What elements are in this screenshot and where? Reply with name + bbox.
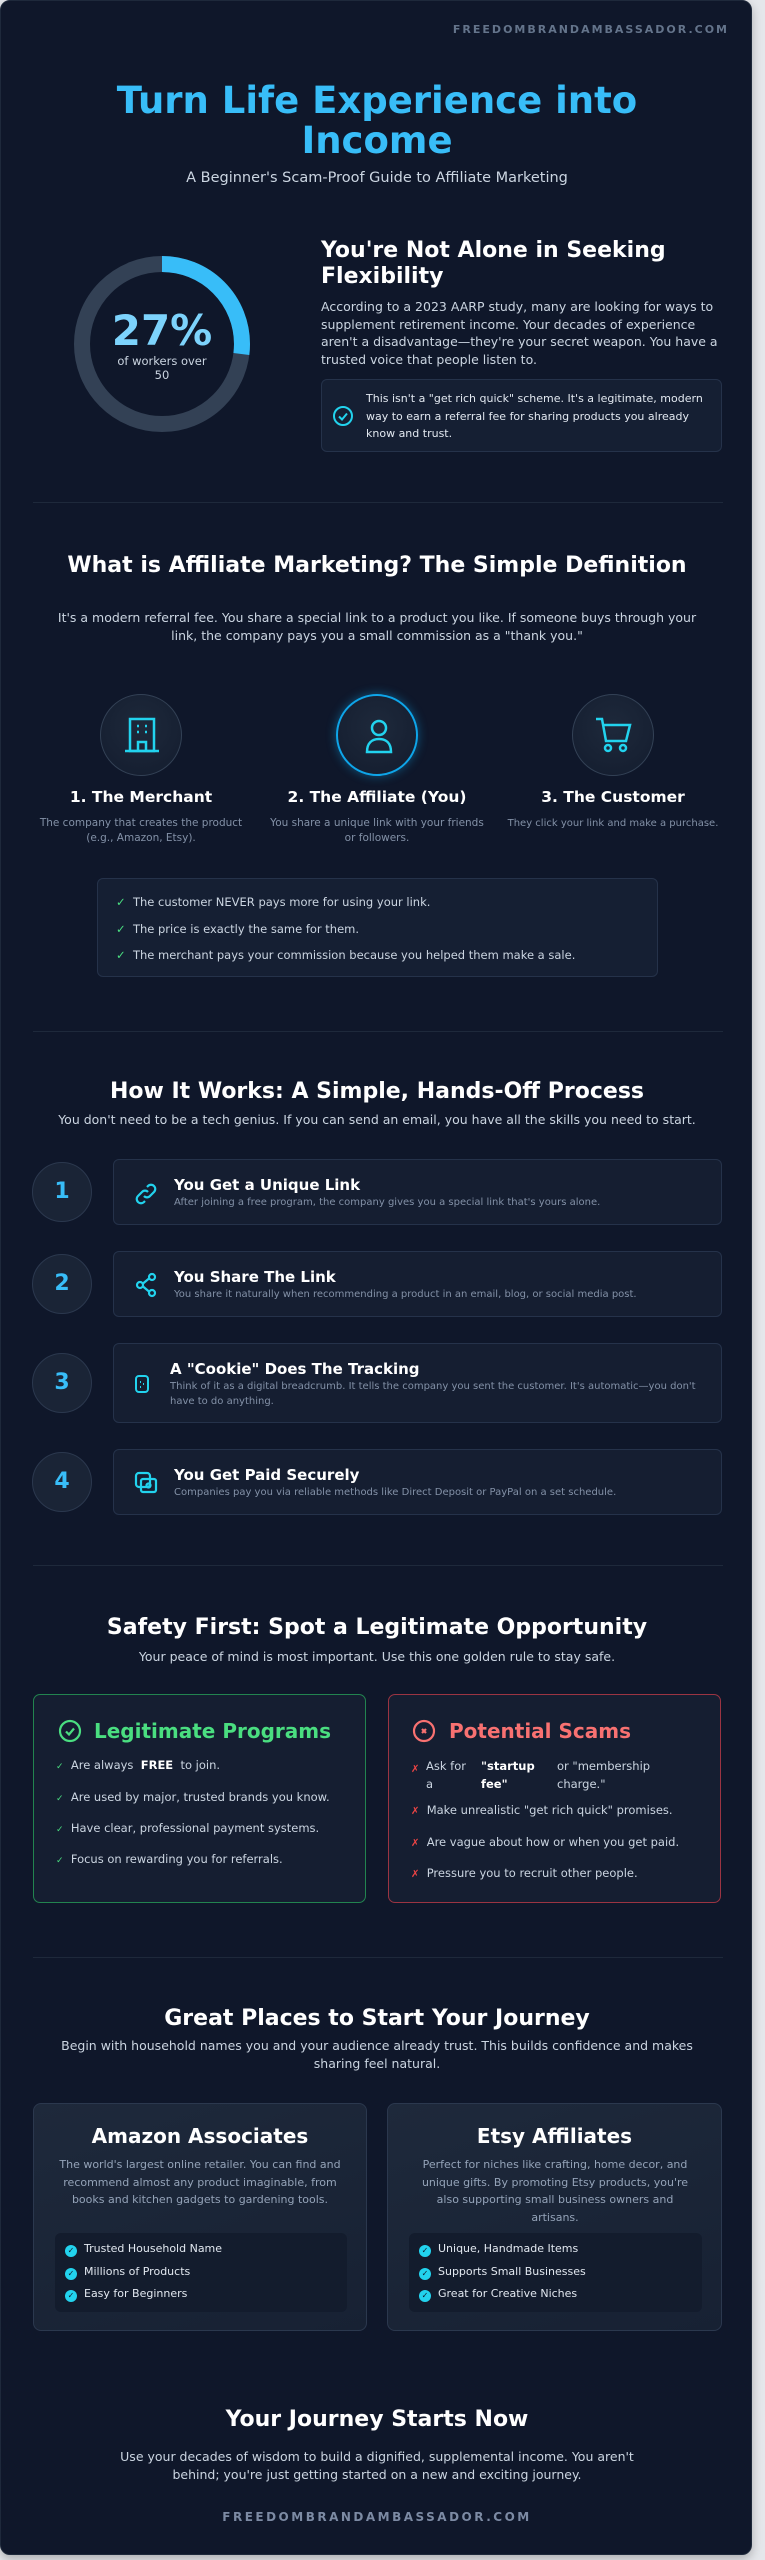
step 3 xyxy=(32,1353,92,1413)
donut chart: 27% xyxy=(74,256,250,432)
panel: etsy affiliates: ✓ xyxy=(422,2269,428,2278)
callout box xyxy=(321,379,722,452)
panel: amazon associates: ✓ xyxy=(68,2269,74,2278)
main card: You share a unique link with your friends or followers. xyxy=(270,817,484,844)
panel: legitimate programs: Legitimate Programs xyxy=(94,1719,331,1743)
main card: You don't need to be a tech genius. If you can send an email, you have all the skills you need to start. xyxy=(58,1112,696,1127)
definition paragraph: It's a modern referral fee. You share a special link to a product you like. If someone buys through your link, the company pays you a small commission as a "thank you." xyxy=(58,610,696,643)
main card: The company that creates the product (e.g., Amazon, Etsy). xyxy=(40,817,242,844)
label: customer: 3. The Customer xyxy=(541,788,685,806)
step 2: 2 xyxy=(54,1271,70,1296)
heading: what is affiliate marketing: What is Affiliate Marketing? The Simple Definition xyxy=(67,553,687,578)
label: merchant: 1. The Merchant xyxy=(70,788,212,806)
panel: etsy affiliates: Unique, Handmade Items xyxy=(438,2242,578,2255)
heading: not alone: You're Not Alone in Seeking Flexibility xyxy=(321,238,666,289)
subtitle: A Beginner's Scam-Proof Guide to Affiliate Marketing xyxy=(186,170,568,186)
panel: potential scams: ✗ xyxy=(411,1764,419,1775)
panel: potential scams: Potential Scams xyxy=(449,1719,631,1743)
heading: great places: Great Places to Start Your Journey xyxy=(164,2006,590,2031)
main card: Begin with household names you and your audience already trust. This builds confidence and makes sharing feel natural. xyxy=(61,2038,693,2071)
step 3: 3 xyxy=(54,1370,70,1395)
step 1 xyxy=(32,1162,92,1222)
main card: After joining a free program, the company gives you a special link that's yours alone. xyxy=(174,1197,600,1208)
footer brand: FREEDOMBRANDAMBASSADOR.COM xyxy=(222,2510,532,2524)
main card: Your peace of mind is most important. Use this one golden rule to stay safe. xyxy=(139,1649,615,1664)
icon: check circle xyxy=(333,406,353,426)
footer heading: Your Journey Starts Now xyxy=(226,2407,528,2432)
footer text: Use your decades of wisdom to build a dignified, supplemental income. You aren't behind; you're just getting started on a new and exciting journey. xyxy=(120,2449,634,2482)
step 4: 4 xyxy=(54,1469,70,1494)
panel: amazon associates xyxy=(33,2103,367,2331)
panel: etsy affiliates: Perfect for niches like crafting, home decor, and unique gifts. By promoting Etsy products, you're also supporting small business owners and artisans. xyxy=(422,2158,688,2224)
panel: etsy affiliates: Great for Creative Niches xyxy=(438,2287,577,2300)
donut chart: 27%: of workers over 50 xyxy=(117,354,207,382)
header brand: FREEDOMBRANDAMBASSADOR.COM xyxy=(453,23,729,36)
step 4 xyxy=(32,1452,92,1512)
panel: amazon associates: Millions of Products xyxy=(84,2265,190,2278)
panel: potential scams: ✗ Are vague about how or when you get paid. xyxy=(411,1835,679,1849)
panel: etsy affiliates: ✓ xyxy=(422,2246,428,2255)
panel: amazon associates: The world's largest online retailer. You can find and recommend almost any product imaginable, from books and kitchen gadgets to gardening tools. xyxy=(59,2158,341,2206)
panel: potential scams: "startup fee" xyxy=(481,1759,535,1791)
icon: merchant building xyxy=(100,694,182,776)
panel: amazon associates: Amazon Associates xyxy=(92,2124,308,2148)
panel: potential scams: or "membership charge." xyxy=(557,1759,650,1791)
main card: A "Cookie" Does The Tracking xyxy=(170,1360,420,1378)
main card: Companies pay you via reliable methods like Direct Deposit or PayPal on a set schedule. xyxy=(174,1487,616,1498)
heading: how it works: How It Works: A Simple, Hands-Off Process xyxy=(110,1079,644,1104)
panel: potential scams: ✗ Pressure you to recruit other people. xyxy=(411,1866,638,1880)
icon: customer cart xyxy=(572,694,654,776)
panel: legitimate programs: ✓ Are used by major, trusted brands you know. xyxy=(56,1790,330,1804)
panel: legitimate programs: ✓ Focus on rewarding you for referrals. xyxy=(56,1852,283,1866)
facts box: ✓ The price is exactly the same for them. xyxy=(116,922,359,936)
step 1: 1 xyxy=(54,1179,70,1204)
panel: amazon associates: ✓ xyxy=(68,2291,74,2300)
icon: affiliate person xyxy=(336,694,418,776)
heading: safety first: Safety First: Spot a Legitimate Opportunity xyxy=(107,1615,647,1640)
panel: legitimate programs xyxy=(33,1694,366,1903)
panel: etsy affiliates: Etsy Affiliates xyxy=(477,2124,632,2148)
panel: potential scams xyxy=(388,1694,721,1903)
panel: amazon associates: Easy for Beginners xyxy=(84,2287,187,2300)
main card: You share it naturally when recommending a product in an email, blog, or social media post. xyxy=(174,1289,637,1300)
panel: etsy affiliates xyxy=(387,2103,722,2331)
panel: potential scams: Ask for a xyxy=(426,1759,466,1791)
facts box: ✓ The merchant pays your commission because you helped them make a sale. xyxy=(116,948,575,962)
panel: amazon associates: Trusted Household Name xyxy=(84,2242,222,2255)
label: affiliate: 2. The Affiliate (You) xyxy=(288,788,466,806)
facts box xyxy=(97,878,658,977)
panel: potential scams: ✗ Make unrealistic "get rich quick" promises. xyxy=(411,1803,673,1817)
panel: etsy affiliates: Supports Small Businesses xyxy=(438,2265,586,2278)
panel: legitimate programs: ✓ Have clear, professional payment systems. xyxy=(56,1821,319,1835)
main card: They click your link and make a purchase. xyxy=(508,818,718,829)
main card: You Get a Unique Link xyxy=(174,1176,360,1194)
main card: Think of it as a digital breadcrumb. It tells the company you sent the customer. It's automatic—you don't have to do anything. xyxy=(170,1381,696,1407)
step 2 xyxy=(32,1254,92,1314)
facts box: ✓ The customer NEVER pays more for using your link. xyxy=(116,895,430,909)
panel: legitimate programs: ✓ Are always FREE to join. xyxy=(56,1758,220,1772)
panel: etsy affiliates: ✓ xyxy=(422,2291,428,2300)
main card: You Get Paid Securely xyxy=(174,1466,359,1484)
title: Turn Life Experience into Income xyxy=(117,79,637,162)
main card: You Share The Link xyxy=(174,1268,336,1286)
paragraph: AARP: According to a 2023 AARP study, many are looking for ways to supplement retirement income. Your decades of experience aren't a disadvantage—they're your secret weapon. You have a trusted voice that people listen to. xyxy=(321,299,718,366)
callout box: This isn't a "get rich quick" scheme. It's a legitimate, modern way to earn a referral fee for sharing products you already know and trust. xyxy=(366,392,703,440)
donut chart: 27%: 27% xyxy=(112,306,212,355)
panel: amazon associates: ✓ xyxy=(68,2246,74,2255)
